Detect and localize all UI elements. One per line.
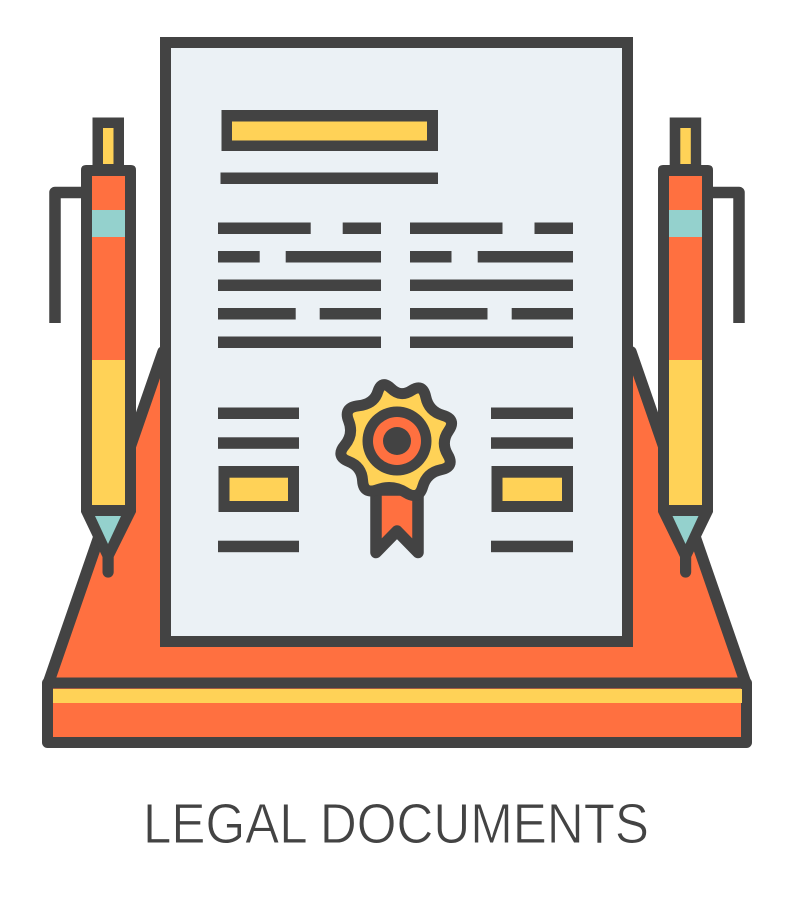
text block: left column <box>218 222 381 348</box>
title: LEGAL DOCUMENTS <box>143 792 649 856</box>
seal rosette <box>341 385 452 496</box>
panel: orange stand <box>48 352 746 742</box>
text block: right column <box>410 222 573 348</box>
right pen clip <box>709 192 739 323</box>
document heading box <box>222 110 438 151</box>
stand base slab <box>48 683 746 742</box>
icon: right pen <box>658 118 739 578</box>
right pen cap <box>670 118 701 170</box>
left pen body <box>81 165 136 578</box>
signature block: right <box>491 408 573 552</box>
signature block: left <box>218 408 299 552</box>
left pen clip <box>55 192 85 323</box>
icon: left pen <box>55 118 136 578</box>
right pen body <box>658 165 713 578</box>
panel: document sheet <box>166 42 628 642</box>
left pen cap <box>92 118 124 170</box>
document subheading line <box>220 172 438 184</box>
seal ribbon <box>376 490 418 552</box>
icon: seal with ribbon <box>341 385 452 552</box>
